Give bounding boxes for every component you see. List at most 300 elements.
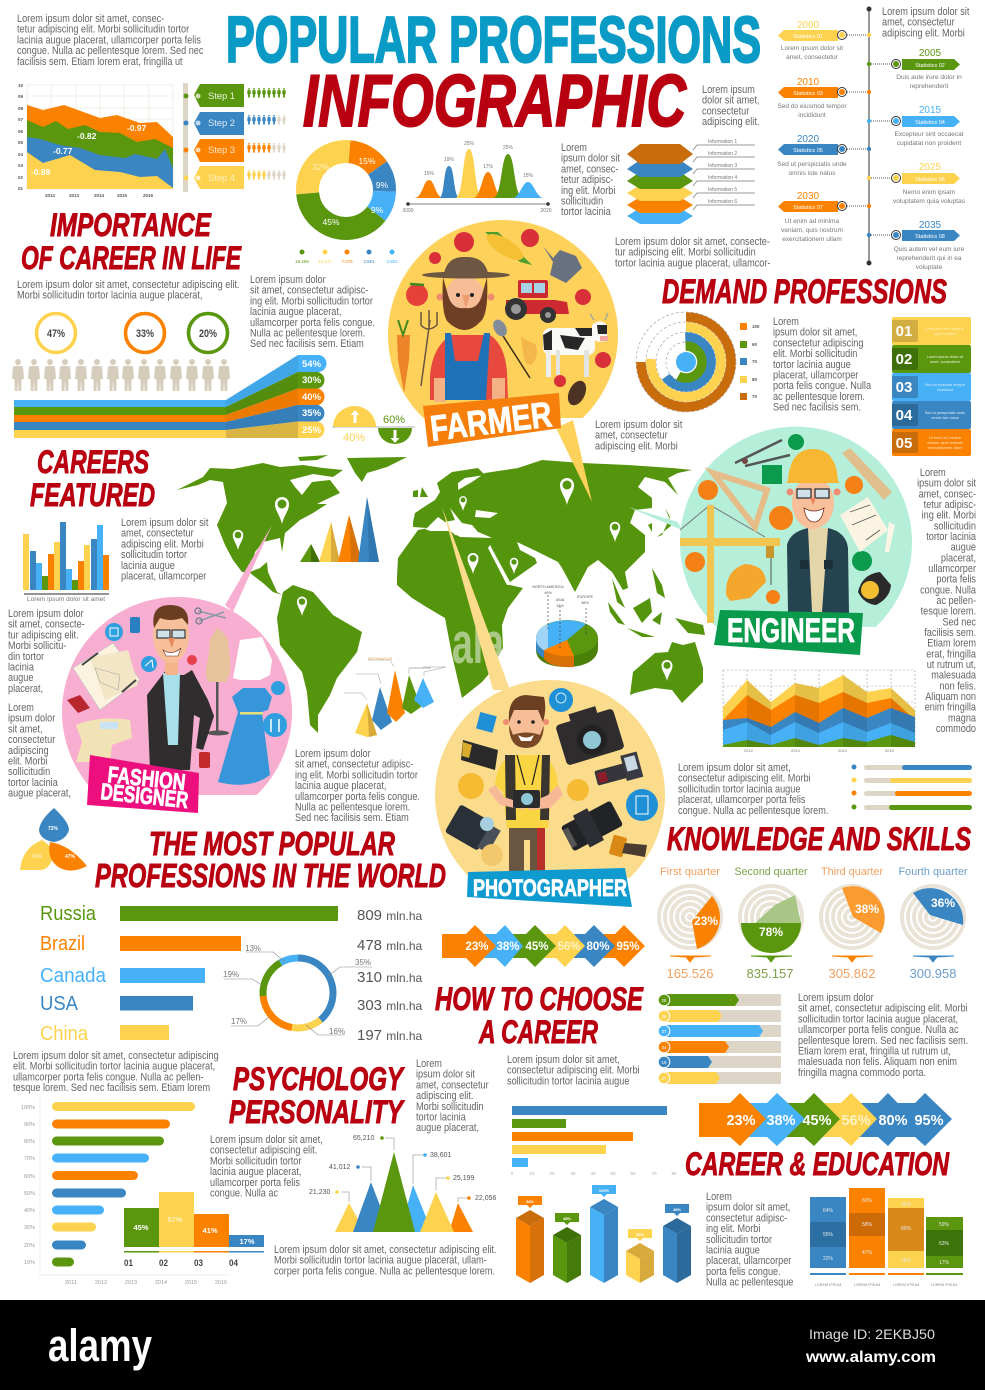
- heading: careers featured: CAREERS: [37, 444, 149, 480]
- text block: right of psychology: Morbi sollicitudin: [416, 1101, 484, 1113]
- heading: importance of career in life: [21, 207, 242, 276]
- pie second quarter: 78%: [759, 925, 783, 939]
- text block: right column: ipsum dolor sit: [917, 478, 976, 490]
- timeline 2020: Statistics 05: [793, 148, 823, 154]
- text block: right column: Etiam lorem: [927, 638, 976, 650]
- mountain chart: 25,199: [453, 1175, 475, 1182]
- text block: right column: ullamcorper: [928, 563, 977, 575]
- text block: right column: amet, consec-: [919, 489, 976, 501]
- title: [226, 3, 761, 142]
- stacked bars: 53%: [939, 1241, 950, 1247]
- text block: skills right: ullamcorper porta felis congue. Nulla ac: [798, 1024, 959, 1036]
- text block: right column: magna: [948, 713, 976, 725]
- timeline 2015: 2015: [919, 105, 942, 116]
- stepped bar chart: 45%: [133, 1223, 149, 1232]
- pyramid chart on map: [344, 657, 446, 737]
- text block: right column: tetur adipisc-: [924, 499, 976, 511]
- peak chart: 3000: [402, 208, 414, 214]
- text block: left column 1: [8, 608, 85, 695]
- text block: skills right: sit amet, consectetur adipiscing elit. Morbi: [798, 1003, 968, 1015]
- text block: beside hexagon stack: ipsum dolor sit: [561, 153, 620, 165]
- photographer illustration: [435, 507, 665, 907]
- mountain chart: 65,210: [353, 1135, 375, 1142]
- text block: left column 2: augue placerat,: [8, 788, 71, 800]
- text block: left column 2: consectetur: [8, 734, 56, 746]
- layered area chart: [723, 670, 915, 753]
- horizontal bar chart bottom left: 40%: [24, 1208, 35, 1214]
- country bars: [40, 903, 423, 1045]
- text block: left column 1: placerat,: [8, 683, 43, 695]
- text block: right column: malesuada: [931, 670, 976, 682]
- stepped bar chart: 01: [124, 1258, 133, 1268]
- stacked bars: 17%: [939, 1260, 950, 1266]
- ribbon chart: 54%: [302, 359, 322, 370]
- text block: career education: ipsum dolor sit amet,: [706, 1202, 790, 1214]
- text block: right column: ing elit. Morbi: [922, 510, 976, 522]
- text block: left column 2: adipiscing: [8, 745, 49, 757]
- stepped bar chart: 02: [159, 1258, 168, 1268]
- stacked bars: 64%: [823, 1208, 834, 1214]
- arrow progress bars: 26: [661, 1014, 667, 1019]
- banner: fashion designer: FASHION: [106, 761, 187, 795]
- item 04: omnis iste natus: [931, 416, 959, 420]
- text block: left column 2: [8, 702, 71, 800]
- text block: beside infographic title: Lorem ipsum: [702, 84, 755, 96]
- text block: below psychology: congue. Nulla ac: [210, 1188, 278, 1200]
- text block: beside hexagon stack: amet, consec-: [561, 164, 618, 176]
- pie third quarter: [819, 884, 885, 981]
- quarter pies: Third quarter: [821, 866, 883, 878]
- timeline: [777, 6, 966, 271]
- area chart: top left: 02: [18, 175, 24, 180]
- timeline 2030: [778, 191, 871, 243]
- item 05: 05: [896, 435, 912, 452]
- item 03: [892, 373, 971, 401]
- area chart: top left: 2013: [69, 193, 80, 198]
- text block: demand: elit. Morbi sollicitudin: [773, 348, 857, 360]
- text block: bottom left: ullamcorper porta felis congue. Nulla ac pellen-: [13, 1072, 203, 1084]
- country bars: Russia: [40, 903, 97, 925]
- text block: below psychology: [210, 1134, 323, 1200]
- area chart: top left: 06: [18, 129, 24, 134]
- donut legend: [295, 250, 398, 264]
- text block: skills right: pellentesque lorem. Sed nec facilisis sem.: [798, 1035, 968, 1047]
- timeline 2035: voluptate: [916, 264, 943, 271]
- item 01: [892, 317, 971, 345]
- gauge 60/40: 40%: [343, 432, 365, 444]
- pie fourth quarter: [900, 884, 966, 981]
- stacked bars: LOREM IPSUM: [854, 1283, 880, 1287]
- item 03: Sed do eiusmod tempor: [925, 383, 966, 387]
- text block: right of psychology: adipiscing elit.: [416, 1090, 473, 1102]
- text block: middle left: ullamcorper porta felis congue.: [250, 317, 375, 329]
- item 01: 01: [896, 323, 912, 340]
- text block: below mountain: [274, 1244, 496, 1278]
- text block: left column 2: Lorem: [8, 702, 34, 714]
- area chart: top left: 07: [18, 117, 24, 122]
- text block: above skills: placerat, ullamcorper porta felis: [678, 794, 806, 806]
- quarter pies: [657, 866, 968, 981]
- people row: [12, 359, 230, 391]
- hexagon stack with information labels: Information 3: [708, 163, 737, 169]
- triangle chart on map: [300, 497, 379, 562]
- banner: photographer: PHOTOGRAPHER: [473, 875, 627, 902]
- timeline 2015: cupidatat non proident: [897, 140, 961, 147]
- text block: right column: Sed nec: [942, 617, 976, 629]
- text block: demand: consectetur adipiscing: [773, 338, 863, 350]
- text block: middle left: Lorem ipsum dolor: [250, 274, 326, 286]
- text block: careers: adipiscing elit. Morbi: [121, 539, 204, 551]
- heading: how to choose a career: A CAREER: [478, 1014, 598, 1050]
- large arrow percent strip: [699, 1093, 952, 1146]
- small arrow percent strip: 80%: [586, 941, 610, 953]
- text block: below psychology: ullamcorper porta felis: [210, 1177, 300, 1189]
- text block: below fashion: Nulla ac pellentesque lorem.: [295, 802, 410, 814]
- stacked bars: 58%: [862, 1222, 873, 1228]
- area chart: top left: 01: [18, 186, 24, 191]
- inland seas: [425, 510, 510, 585]
- layered area chart: 2014: [838, 748, 848, 753]
- hexagon stack with information labels: Information 1: [708, 139, 737, 145]
- text block: bottom left: [13, 1050, 219, 1094]
- timeline 2000: 2000: [797, 20, 820, 31]
- world map: [177, 455, 705, 733]
- ring chart: 19%: [223, 970, 239, 979]
- stepped bar chart: 04: [229, 1258, 238, 1268]
- stacked bars: 55%: [823, 1232, 834, 1238]
- text block: bottom left: Lorem ipsum dolor sit amet, consectetur adipiscing: [13, 1050, 219, 1062]
- text block: skills right: Lorem ipsum dolor: [798, 992, 874, 1004]
- stacked bars: 22%: [823, 1256, 834, 1262]
- donut chart: 32%: [312, 162, 330, 172]
- text block: careers: lacinia augue: [121, 560, 175, 572]
- hexagon stack with information labels: [627, 139, 755, 224]
- text block: top left intro: Lorem ipsum dolor sit amet, consec-: [17, 13, 164, 25]
- area chart: top left: 05: [18, 140, 24, 145]
- country bars: China: [40, 1023, 89, 1045]
- text block: beside hexagon stack: ing elit. Morbi: [561, 185, 615, 197]
- donut legend: 3.851: [363, 259, 375, 264]
- text block: above demand heading: Lorem ipsum dolor sit amet, consecte-: [615, 236, 770, 248]
- horizontal bar chart bottom left: 10%: [24, 1260, 35, 1266]
- text block: left column 1: sit amet, consecte-: [8, 619, 85, 631]
- item 05: veniam, quis nostrum: [927, 441, 963, 445]
- text block: right of psychology: ipsum dolor sit: [416, 1069, 475, 1081]
- donut chart: 9%: [371, 205, 384, 215]
- banner: engineer: [714, 610, 863, 655]
- horizontal bars with axis: 80: [671, 1171, 677, 1176]
- banner: engineer: ENGINEER: [727, 612, 855, 650]
- text block: right column: congue. Nulla: [920, 585, 976, 597]
- horizontal bar chart bottom left: 2016: [215, 1280, 227, 1286]
- steps list: [183, 83, 286, 192]
- percent rings: 33%: [136, 328, 154, 340]
- footer bar: [0, 1300, 985, 1390]
- text block: right column: Lorem: [920, 467, 946, 479]
- timeline 2020: Sed ut perspiciatis unde: [777, 161, 847, 168]
- stacked bars: 47%: [862, 1250, 873, 1256]
- radial legend: 100: [752, 324, 760, 329]
- timeline 2010: 2010: [797, 77, 820, 88]
- text block: right column: erat, fringilla: [926, 649, 976, 661]
- country bars: USA: [40, 993, 79, 1015]
- heading: importance of career in life: IMPORTANCE: [50, 207, 212, 243]
- text block: middle left: lacinia augue placerat,: [250, 306, 341, 318]
- quarter pies: First quarter: [660, 866, 720, 878]
- timeline 2005: [867, 48, 962, 90]
- timeline 2010: [777, 77, 871, 119]
- timeline 2000: Lorem ipsum dolor sit: [781, 45, 843, 52]
- heading: careers featured: FEATURED: [30, 477, 155, 513]
- heading: most popular professions: PROFESSIONS IN THE WORLD: [95, 857, 446, 894]
- pie first quarter: [657, 884, 723, 981]
- ring chart: 35%: [355, 958, 371, 967]
- bar chart: careers: [23, 522, 109, 603]
- ribbon chart: 25%: [302, 425, 322, 436]
- text block: beside infographic title: dolor sit amet,: [702, 95, 759, 107]
- pie second quarter: 835.157: [746, 966, 794, 981]
- heading: how to choose a career: [435, 981, 644, 1050]
- horizontal bars with axis: 0: [511, 1171, 514, 1176]
- large arrow percent strip: 80%: [878, 1113, 908, 1129]
- engineering tools: [680, 434, 895, 623]
- text block: above skills: congue. Nulla ac pellentesque lorem.: [678, 805, 828, 817]
- quarter pies: Fourth quarter: [898, 866, 968, 878]
- text block: career education: Nulla ac pellentesque: [706, 1277, 794, 1289]
- peak chart: 25%: [464, 141, 475, 147]
- hexagon stack with information labels: Information 2: [708, 151, 737, 157]
- pie second quarter: [738, 884, 804, 981]
- large arrow percent strip: 38%: [766, 1113, 796, 1129]
- text block: demand: ac pellentesque lorem.: [773, 391, 865, 403]
- radial legend: 60: [752, 342, 758, 347]
- text block: left column 1: tur adipiscing elit.: [8, 630, 79, 642]
- donut chart: 9%: [376, 180, 389, 190]
- text block: demand: tortor lacinia augue: [773, 359, 851, 371]
- text block: careers: placerat, ullamcorper: [121, 571, 207, 583]
- item 01: Duis aute irure dolor in: [926, 327, 964, 331]
- text block: below fashion: lacinia augue placerat,: [295, 780, 386, 792]
- text block: below fashion: ullamcorper porta felis congue.: [295, 791, 420, 803]
- text block: beside infographic title: [702, 84, 759, 128]
- text block: timeline top: Lorem ipsum dolor sit: [882, 6, 970, 18]
- text block: right of psychology: [416, 1058, 489, 1134]
- horizontal bars with axis: 30: [570, 1171, 576, 1176]
- mountain chart: 22,056: [475, 1195, 497, 1202]
- text block: below mountain: Lorem ipsum dolor sit amet, consectetur adipiscing elit.: [274, 1244, 496, 1256]
- ribbon chart: 35%: [302, 408, 322, 419]
- horizontal bar chart bottom left: 2014: [155, 1280, 167, 1286]
- text block: career education: porta felis congue.: [706, 1266, 781, 1278]
- text block: demand: placerat, ullamcorper: [773, 370, 859, 382]
- mountain chart: 41,012: [329, 1164, 351, 1171]
- horizontal bar chart bottom left: 2013: [125, 1280, 137, 1286]
- text block: right column: augue: [951, 542, 976, 554]
- text block: below how to choose: consectetur adipiscing elit. Morbi: [507, 1065, 640, 1077]
- horizontal bar chart bottom left: 70%: [24, 1156, 35, 1162]
- footer bar: Image ID: 2EKBJ50: [809, 1326, 935, 1342]
- area chart: top left: 04: [18, 152, 24, 157]
- text block: below fashion: [295, 748, 420, 824]
- step 2: Step 2: [208, 118, 235, 129]
- pie chart 3d: 15%: [556, 604, 564, 608]
- horizontal bars with axis: 60: [630, 1171, 636, 1176]
- area chart: top left: 03: [18, 163, 24, 168]
- text block: right column: tesque lorem.: [921, 606, 976, 618]
- farm objects: [397, 229, 611, 408]
- text block: career education: Lorem: [706, 1191, 732, 1203]
- item 02: [892, 345, 971, 373]
- bar blue: [663, 1204, 691, 1283]
- text block: right column: commodo: [936, 723, 976, 735]
- pyramid chart on map: INFORMATION: [368, 657, 393, 661]
- horizontal bar chart bottom left: 30%: [24, 1225, 35, 1231]
- item 04: Sed ut perspiciatis unde: [925, 411, 965, 415]
- text block: importance: Lorem ipsum dolor sit amet, consectetur adipiscing elit.: [17, 279, 239, 291]
- text block: demand: porta felis congue. Nulla: [773, 381, 871, 392]
- stepped bar chart: 03: [194, 1258, 203, 1268]
- banner: fashion designer: [87, 755, 199, 813]
- watermark fragment on Africa: ala: [452, 611, 504, 676]
- horizontal bar chart bottom left: [21, 1098, 230, 1286]
- photo gear: [445, 688, 658, 866]
- ring chart: [223, 944, 372, 1042]
- text block: below psychology: lacinia augue placerat,: [210, 1166, 301, 1178]
- peak chart: 17%: [483, 164, 494, 170]
- timeline 2005: Statistics 02: [915, 63, 945, 69]
- pie third quarter: 305.862: [828, 966, 876, 981]
- stepped bar chart: [124, 1192, 264, 1268]
- text block: above demand heading: [615, 236, 770, 270]
- horizontal bars with axis: 50: [610, 1171, 616, 1176]
- item 02: 02: [896, 351, 912, 368]
- step 4: Step 4: [208, 173, 235, 184]
- text block: below how to choose: Lorem ipsum dolor sit amet,: [507, 1054, 620, 1066]
- pie fourth quarter: 36%: [931, 896, 955, 910]
- timeline 2035: [867, 220, 965, 271]
- designer figure: [147, 605, 214, 770]
- text block: bottom left: elit. Morbi sollicitudin tortor lacinia augue placerat,: [13, 1061, 215, 1073]
- horizontal bars with axis: 10: [529, 1171, 535, 1176]
- peak chart: 25%: [503, 145, 514, 151]
- large arrow percent strip: 45%: [802, 1113, 832, 1129]
- progress bars: [852, 764, 972, 810]
- text block: careers: [121, 517, 209, 583]
- peak chart: 2020: [540, 208, 552, 214]
- small arrow percent strip: [442, 925, 645, 967]
- text block: skills right: Etiam lorem erat, fringilla ut rutrum ut,: [798, 1046, 951, 1058]
- text block: right of psychology: Lorem: [416, 1058, 442, 1070]
- text block: right column: [917, 467, 977, 735]
- heading: psychology personality: [229, 1061, 405, 1130]
- map pins: [233, 478, 672, 681]
- text block: top left intro: [17, 13, 203, 68]
- donut chart: 15%: [358, 156, 376, 166]
- ribbon chart: [14, 355, 326, 438]
- text block: top left intro: tetur adipiscing elit. Morbi sollicitudin tortor: [17, 24, 190, 36]
- item 05: exercitationem ullam: [928, 446, 962, 450]
- stacked bars: LOREM IPSUM: [815, 1283, 841, 1287]
- horizontal bar chart bottom left: 2011: [65, 1280, 77, 1286]
- pie chart 3d: [532, 585, 598, 667]
- timeline 2000: Statistics 01: [793, 34, 823, 40]
- text block: beside hexagon stack: tortor lacinia: [561, 207, 611, 218]
- timeline 2020: [777, 134, 871, 177]
- text block: timeline top: [882, 6, 970, 40]
- radial chart: [636, 312, 760, 412]
- peak chart: 19%: [444, 157, 455, 163]
- timeline 2035: reprehenderit qui in ea: [896, 255, 962, 262]
- large arrow percent strip: 23%: [726, 1113, 756, 1129]
- hexagon stack with information labels: Information 6: [708, 199, 737, 205]
- timeline 2000: [778, 20, 871, 61]
- text block: careers: sollicitudin tortor: [121, 549, 188, 561]
- country bars: 809 mln.ha: [357, 907, 423, 924]
- small arrow percent strip: 56%: [557, 941, 581, 953]
- radial legend: [740, 323, 760, 400]
- text block: career education: [706, 1191, 794, 1289]
- horizontal bars with axis: 70: [651, 1171, 657, 1176]
- text block: below farmer: Lorem ipsum dolor sit: [595, 419, 683, 431]
- text block: middle left: ing elit. Morbi sollicitudin tortor: [250, 296, 374, 308]
- footer bar: www.alamy.com: [805, 1349, 936, 1366]
- horizontal bars with axis: 40: [590, 1171, 596, 1176]
- text block: middle left: sit amet, consectetur adipisc-: [250, 285, 368, 297]
- item 04: 04: [896, 407, 913, 424]
- area chart: top left: 2014: [94, 193, 105, 198]
- peak chart: 15%: [523, 173, 534, 179]
- country bars: 197 mln.ha: [357, 1027, 423, 1044]
- quarter pies: Second quarter: [734, 866, 808, 878]
- area chart: top left: 10: [18, 83, 24, 88]
- small arrow percent strip: 23%: [465, 941, 489, 953]
- text block: beside infographic title: adipiscing elit.: [702, 116, 759, 128]
- bar yellow: 28%: [636, 1232, 644, 1237]
- bar green: 48%: [563, 1216, 571, 1221]
- timeline 2025: Nemo enim ipsam: [903, 189, 955, 196]
- text block: left column 1: lacinia: [8, 662, 34, 674]
- text block: career education: lacinia augue: [706, 1245, 760, 1257]
- stacked bars: 80%: [901, 1226, 912, 1232]
- donut legend: 13.137: [318, 259, 332, 264]
- text block: right column: enim fringilla: [925, 702, 976, 714]
- text block: right column: placerat,: [941, 553, 976, 565]
- text block: above skills: consectetur adipiscing elit. Morbi: [678, 773, 811, 785]
- title: INFOGRAPHIC: [303, 61, 687, 142]
- timeline 2020: 2020: [797, 134, 820, 145]
- stepped bar chart: 17%: [239, 1237, 255, 1246]
- large arrow percent strip: 95%: [914, 1113, 944, 1129]
- text block: right column: tortor lacinia: [926, 531, 976, 543]
- text block: below farmer: [595, 419, 683, 453]
- stacked bars: 59%: [939, 1222, 950, 1228]
- peak chart: [402, 141, 552, 214]
- text block: below fashion: Lorem ipsum dolor: [295, 748, 371, 760]
- text block: left column 1: Lorem ipsum dolor: [8, 608, 84, 620]
- area chart: top left: 08: [18, 106, 24, 111]
- text block: below psychology: consectetur adipiscing elit.: [210, 1145, 317, 1157]
- icons and objects: [67, 608, 287, 785]
- farmer illustration: [388, 220, 618, 502]
- horizontal bar chart bottom left: 50%: [24, 1191, 35, 1197]
- step 3: Step 3: [208, 145, 235, 156]
- bar orange: [516, 1196, 544, 1283]
- hexagon stack with information labels: Information 5: [708, 187, 737, 193]
- timeline 2030: 2030: [797, 191, 820, 202]
- timeline 2005: 2005: [919, 48, 942, 59]
- country bars: 303 mln.ha: [357, 997, 423, 1014]
- text block: middle left: Nulla ac pellentesque lorem.: [250, 328, 365, 340]
